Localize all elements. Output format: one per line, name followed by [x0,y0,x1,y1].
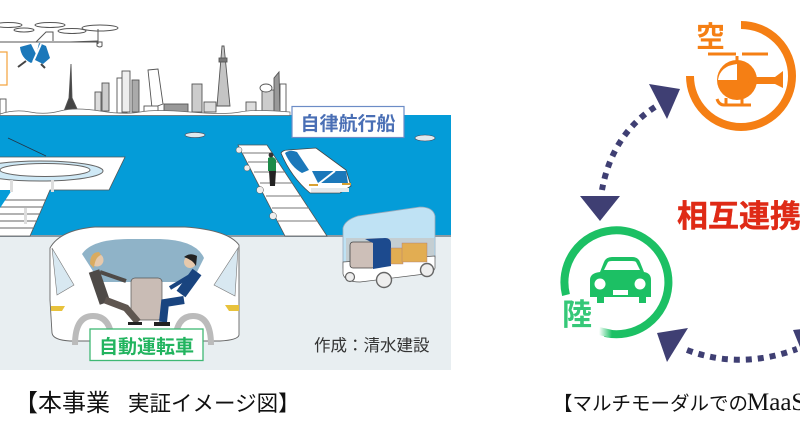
icon: land car circle [562,230,668,334]
arrow: land to sea [657,328,800,362]
illustration: autonomous cargo cart [343,207,435,288]
illustration: floating pier right [236,145,327,236]
label: autonomous vessel: 自律航行船 [300,113,396,135]
caption: demonstration image: 【本事業 [14,390,110,417]
label: autonomous car [90,329,203,360]
text: land: 陸 [562,299,592,332]
text: mutual coordination: 相互連携 [677,199,800,234]
illustration: small buoys [185,132,435,141]
caption: multimodal MaaS: 【マルチモーダルでの [553,394,748,415]
illustration: flying car [0,22,118,68]
label: autonomous car: 自動運転車 [99,336,194,358]
label: autonomous vessel [292,106,404,138]
passenger right [154,254,197,326]
illustration: city skyline [0,46,290,116]
ground background [0,235,451,370]
illustration: standing person on pier [268,153,276,186]
illustration: autonomous vessel [281,148,351,193]
text: sky: 空 [696,21,725,54]
suitcase [131,278,162,320]
illustration: heliport floating platform and pier [0,138,125,236]
water background [0,115,451,236]
passenger left [90,252,142,325]
icon: sky helicopter circle [690,21,792,127]
illustration: autonomous passenger car [50,227,239,345]
arrow: sky to land [580,84,680,221]
label box: orange sky vehicle tag [0,52,7,85]
caption: demonstration image: 実証イメージ図】 [128,392,300,416]
panel: demonstration scene illustration [0,22,451,370]
panel: multimodal MaaS cycle [562,21,800,362]
credit text: 作成：清水建設 [314,336,430,355]
